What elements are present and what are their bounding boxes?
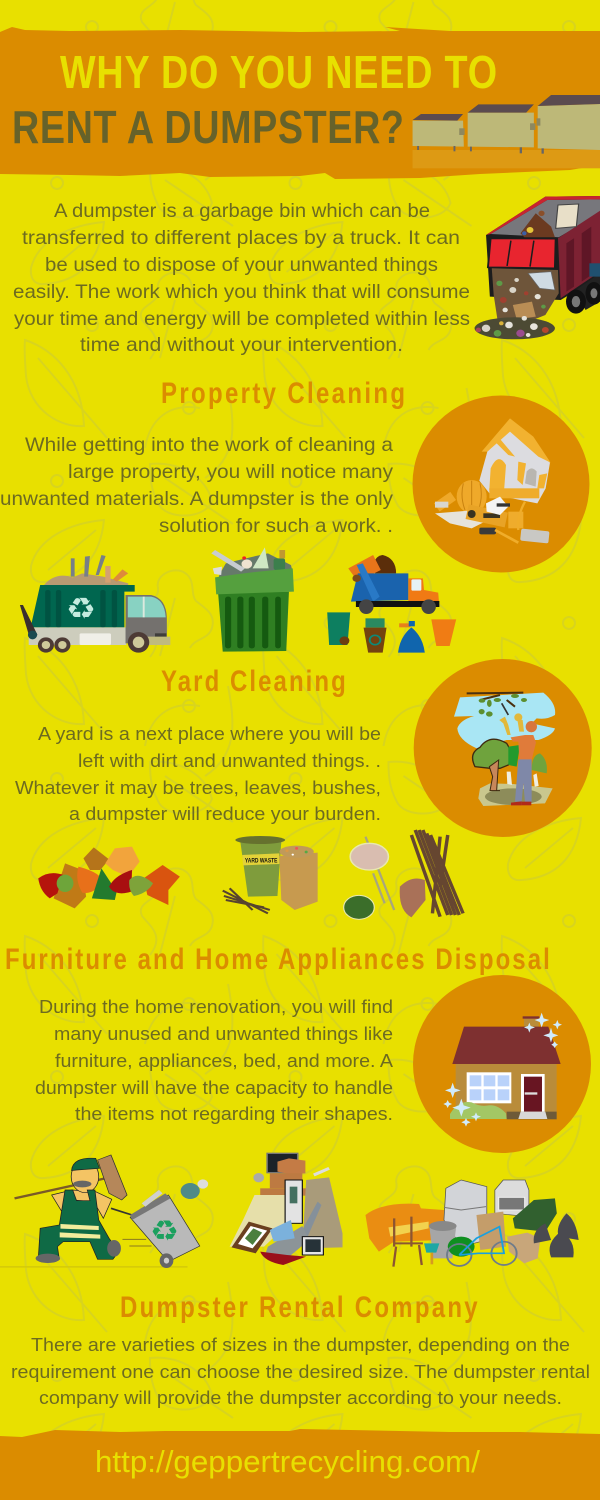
heading: dumpster rental company: Dumpster Rental Company [120,1289,478,1324]
icon: furniture and appliances [365,1180,579,1267]
footer banner [0,1429,600,1500]
icon row: furniture and junk [0,1153,579,1268]
text block: dumpster rental company [11,1334,590,1408]
text block: intro: easily. The work which you think that will consume [13,281,470,303]
text block: yard cleaning: A yard is a next place where you will be [38,723,381,744]
text block: furniture [35,996,394,1124]
icon: tipping dumpster truck [475,196,600,339]
header banner [0,27,600,179]
icon row: property cleaning trucks and bin [20,547,456,653]
text block: dumpster rental company: requirement one can choose the desired size. The dumpster rental [11,1361,590,1382]
text block: intro: A dumpster is a garbage bin which can be [54,200,430,222]
icon: circle with gardener [414,659,592,837]
text block: furniture: the items not regarding their shapes. [75,1103,393,1124]
heading: property cleaning: Property Cleaning [161,375,405,410]
icon: yard waste bin and paper bag [223,836,318,913]
text block: furniture: furniture, appliances, bed, and more. A [55,1050,394,1071]
icon: small bins and bags [327,612,456,653]
icon: three dumpsters [413,95,600,168]
text block: yard cleaning [15,723,381,824]
icon: blue dump truck [348,555,439,614]
text block: property cleaning: While getting into the work of cleaning a [25,434,393,456]
icon: garbage truck: ♻ [66,593,96,626]
heading: rent a dumpster: RENT A DUMPSTER? [12,101,404,153]
text block: furniture: many unused and unwanted things like [54,1023,393,1044]
text block: intro: time and without your intervention. [80,334,403,356]
text block: intro: your time and energy will be completed within less [14,308,470,330]
icon: autumn leaves [38,847,180,908]
text block: dumpster rental company: company will provide the dumpster according to your needs. [39,1387,562,1408]
icon: yard waste bin and paper bag: YARD WASTE [245,857,278,865]
icon: junk pile [230,1153,343,1265]
text block: dumpster rental company: There are varieties of sizes in the dumpster, depending on the [31,1334,570,1355]
text block: yard cleaning: left with dirt and unwanted things. . [78,750,381,771]
icon: twigs and clippings [344,830,463,919]
text block: yard cleaning: a dumpster will reduce your burden. [69,803,381,824]
text block: property cleaning: solution for such a work. . [159,515,393,537]
heading: yard cleaning: Yard Cleaning [161,663,346,698]
icon row: yard waste [38,830,463,919]
icon: garbage truck [20,555,170,653]
heading: furniture and home appliances disposal: Furniture and Home Appliances Disposal [5,941,550,976]
icon: running worker with bin [0,1155,208,1268]
text block: furniture: dumpster will have the capacity to handle [35,1077,393,1098]
text block: property cleaning: large property, you will notice many [68,461,393,483]
text block: property cleaning [0,434,393,537]
icon: green trash bin [211,547,294,652]
heading: why do you need to: WHY DO YOU NEED TO [60,46,497,98]
text block: property cleaning: unwanted materials. A dumpster is the only [0,488,393,510]
text block: intro: be used to dispose of your unwanted things [45,254,438,276]
text block: furniture: During the home renovation, you will find [39,996,393,1017]
icon: circle with house [413,975,591,1153]
text block: intro: transferred to different places by a truck. It can [22,227,460,249]
text block: intro [13,200,470,356]
icon: circle with house and tools [412,396,590,572]
icon: running worker with bin: ♻ [150,1216,179,1248]
text block: yard cleaning: Whatever it may be trees, leaves, bushes, [15,777,381,798]
footer url: http://geppertrecycling.com/ [95,1444,480,1479]
